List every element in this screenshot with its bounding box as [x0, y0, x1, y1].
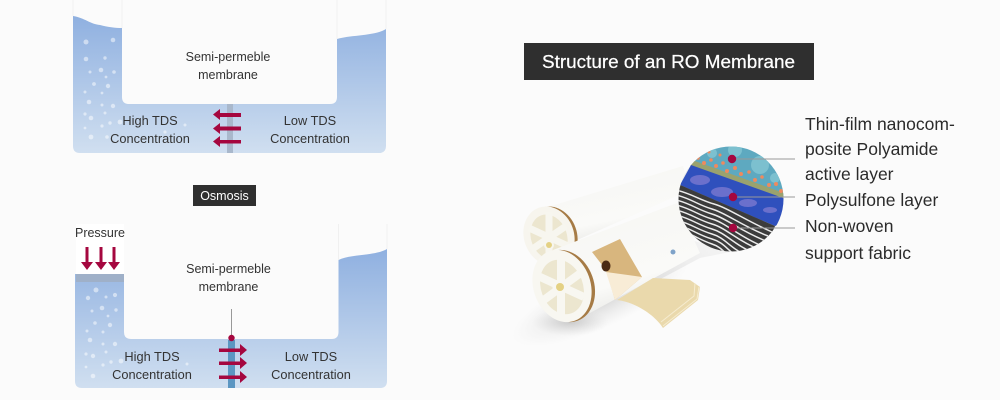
tank outline above water: [338, 224, 387, 260]
magnified membrane layers: [678, 146, 795, 252]
shadow: [502, 236, 698, 364]
label: high TDS: High TDS: [124, 349, 180, 364]
back cylinder: [541, 166, 690, 241]
label: pressure: Pressure: [75, 226, 125, 240]
label: low TDS: Low TDS: [284, 113, 336, 128]
label: semi-permeable membrane: Semi-permeble: [186, 262, 271, 276]
cutaway core: [592, 239, 642, 300]
heading: structure of an RO membrane: Structure of an RO Membrane: [542, 52, 795, 73]
membrane pointer: [228, 309, 235, 341]
label: low TDS: Low TDS: [285, 349, 337, 364]
magnifier cone: [640, 203, 735, 290]
polysulfone layer: [680, 165, 786, 226]
label: high TDS: Concentration: [110, 131, 190, 146]
membrane strip: [228, 340, 235, 388]
solute particles: [84, 288, 188, 378]
illustration: RO membrane cylinders: [502, 166, 735, 364]
label: high TDS: High TDS: [122, 113, 178, 128]
heading: osmosis: Osmosis: [200, 189, 249, 203]
label: support fabric: support fabric: [805, 243, 911, 263]
polyamide layer: [694, 146, 784, 196]
heading: osmosis: [193, 185, 256, 206]
loose membrane sheets: [617, 278, 700, 328]
water tank: [73, 16, 386, 153]
arrows: pressure: [81, 247, 120, 270]
back cylinder end cap: [515, 199, 586, 273]
support fabric: [678, 185, 775, 252]
label: polysulfone layer: Polysulfone layer: [805, 190, 938, 210]
water tank: [75, 249, 387, 388]
leader lines: [732, 159, 795, 228]
label: polyamide layer: active layer: [805, 164, 894, 184]
front cylinder end cap: [523, 241, 605, 331]
label: high TDS: Concentration: [112, 367, 192, 382]
arrows: flow to the left: [213, 109, 241, 147]
label: low TDS: Concentration: [270, 131, 350, 146]
label: polyamide layer: posite Polyamide: [805, 139, 938, 159]
label: polyamide layer: Thin-film nanocom-: [805, 114, 955, 134]
logo mark: [670, 250, 676, 254]
panel: osmosis diagram: [73, 0, 386, 153]
label: semi-permeable membrane: membrane: [199, 280, 258, 294]
solute particles: [83, 38, 186, 139]
heading: structure of an RO membrane: [524, 43, 814, 80]
layer markers: [728, 155, 737, 232]
front cylinder: [553, 203, 700, 313]
panel: reverse osmosis diagram: [75, 224, 387, 388]
white piston area: [76, 224, 124, 274]
label: semi-permeable membrane: Semi-permeble: [186, 50, 270, 64]
arrows: flow to the right: [219, 344, 247, 383]
label: semi-permeable membrane: membrane: [198, 68, 258, 82]
label: support fabric: Non-woven: [805, 216, 894, 236]
pressure plate: [76, 274, 124, 282]
membrane strip: [227, 104, 233, 153]
tank outline above water: [73, 0, 386, 39]
label: low TDS: Concentration: [271, 367, 351, 382]
